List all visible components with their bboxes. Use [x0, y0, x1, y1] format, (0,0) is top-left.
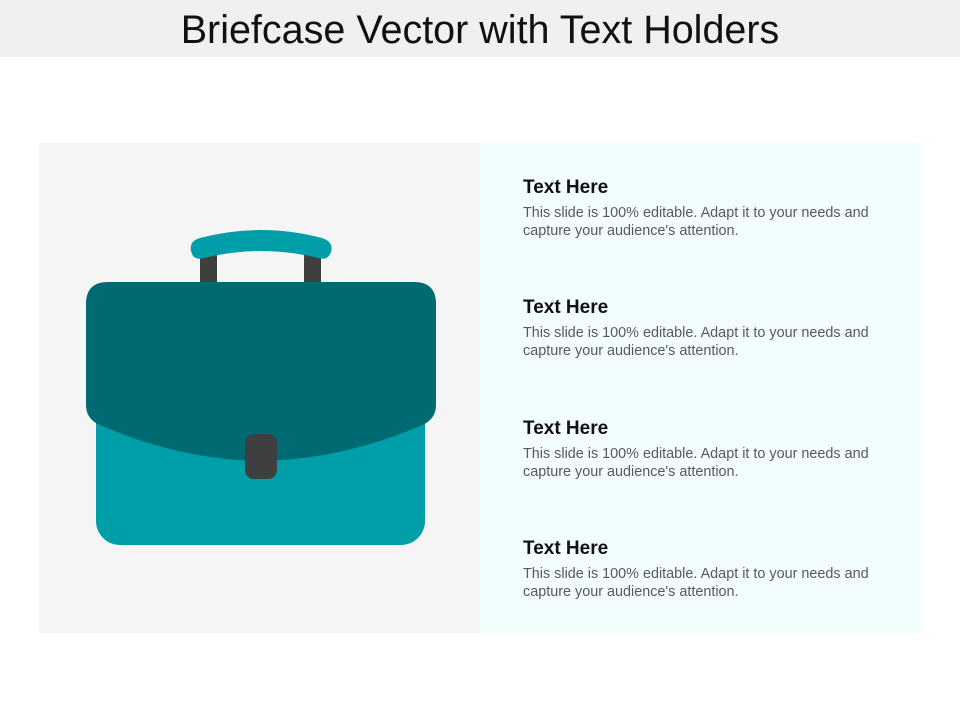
text block 1 [523, 177, 869, 239]
panel: left briefcase area [39, 143, 480, 633]
text block 2: This slide is 100% editable. Adapt it to your needs and capture your audience's attention. [523, 325, 869, 359]
text block 1: This slide is 100% editable. Adapt it to your needs and capture your audience's attention. [523, 205, 869, 239]
text block 3 [523, 418, 869, 480]
text block 4: This slide is 100% editable. Adapt it to your needs and capture your audience's attention. [523, 566, 869, 600]
text block 2 [523, 297, 869, 359]
text block 3: Text Here [523, 418, 608, 439]
text block 1: Text Here [523, 177, 608, 198]
text block 4: Text Here [523, 538, 608, 559]
panel: right text area [480, 143, 921, 633]
text block 4 [523, 538, 869, 600]
text block 2: Text Here [523, 297, 608, 318]
text block 3: This slide is 100% editable. Adapt it to your needs and capture your audience's attention. [523, 446, 869, 480]
title bar: Briefcase Vector with Text Holders [181, 8, 779, 52]
title bar [0, 0, 960, 57]
